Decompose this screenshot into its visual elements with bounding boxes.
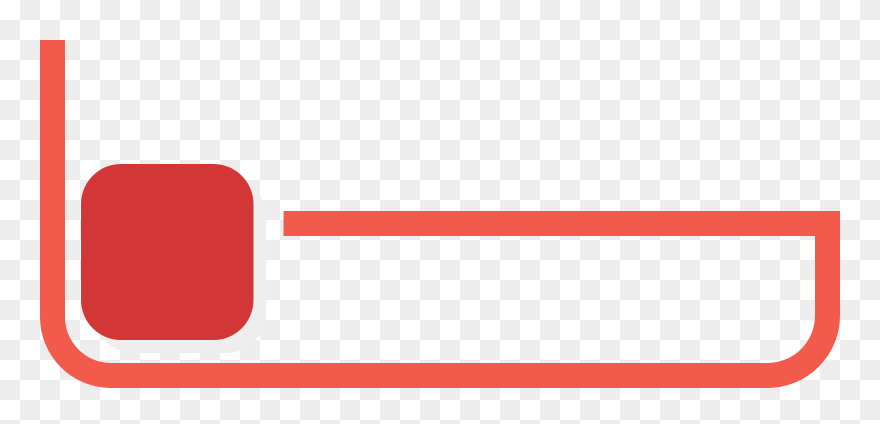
frame line: coral outline [52, 40, 828, 376]
icon square: red rounded tile [81, 164, 254, 340]
square shadow [94, 177, 266, 353]
